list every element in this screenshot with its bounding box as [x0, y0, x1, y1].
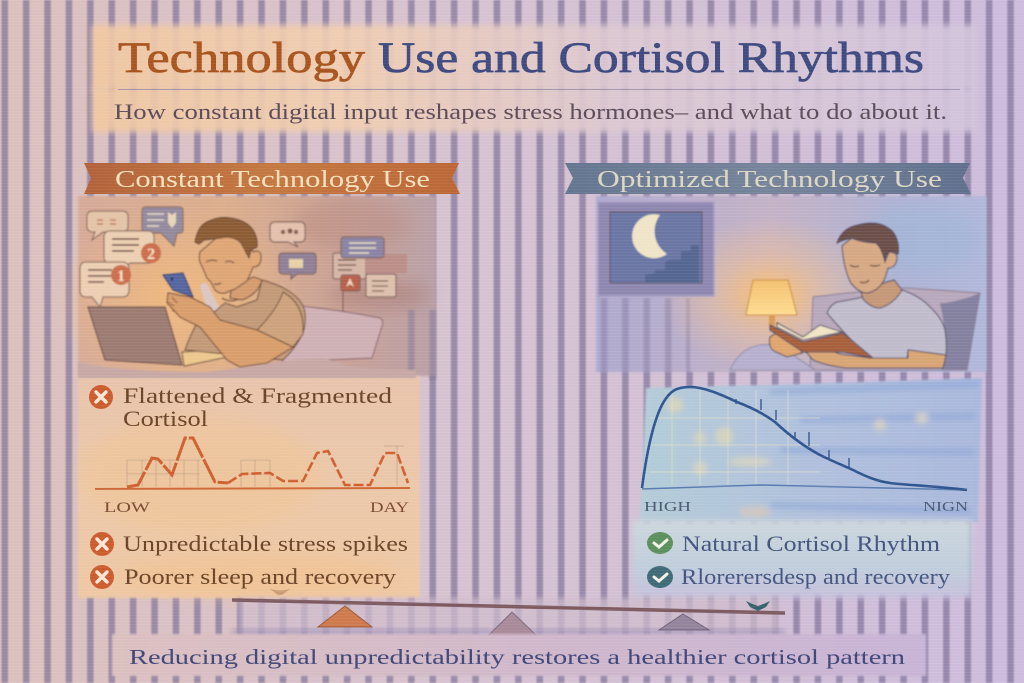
- icon: down chevron: [746, 601, 770, 611]
- title: Technology: [118, 35, 366, 82]
- panel: optimized technology use: [596, 196, 986, 598]
- seesaw balance: [232, 589, 785, 638]
- bed and pillow: [200, 283, 383, 362]
- laptop: [88, 307, 227, 366]
- bullet: natural cortisol rhythm: Natural Cortisol Rhythm: [682, 531, 940, 556]
- header panel: [92, 25, 976, 132]
- subtitle: How constant digital input reshapes stress hormones– and what to do about it.: [114, 99, 947, 124]
- neck: [858, 280, 902, 308]
- hair: [195, 218, 257, 258]
- bullet: flattened and fragmented cortisol: [89, 383, 392, 431]
- line chart: natural cortisol rhythm: [642, 387, 968, 515]
- bullet: poorer sleep and recovery: Poorer sleep and recovery: [124, 564, 396, 589]
- axis labels: LOW: [104, 500, 151, 516]
- line chart: fragmented cortisol: DAY: [370, 500, 409, 516]
- icon: chat bubbles left: 2: [147, 246, 155, 263]
- icon: night window with moon: [598, 202, 714, 296]
- bed and headboard: [730, 288, 980, 370]
- conclusion band: Reducing digital unpredictability restores a healthier cortisol pattern: [129, 645, 905, 669]
- phone: [163, 273, 193, 297]
- axis labels: HIGH: [644, 500, 691, 515]
- lower text panel background: [632, 520, 972, 598]
- bullet: better sleep and recovery: Rlorerersdesp and recovery: [681, 564, 950, 589]
- lamp: [746, 280, 797, 327]
- illustration: person reading by lamp: [730, 223, 980, 370]
- lower text panel background: [78, 376, 420, 598]
- icon: cross: [89, 385, 113, 409]
- icon: cross: [90, 565, 114, 589]
- shirt: [185, 280, 305, 360]
- person: [163, 218, 305, 367]
- shirt: [827, 290, 946, 360]
- banner: constant technology use: [84, 163, 460, 194]
- banner: constant technology use: Constant Technology Use: [115, 167, 430, 193]
- face: [199, 234, 261, 293]
- line chart: fragmented cortisol: [95, 438, 410, 516]
- person: [770, 223, 946, 368]
- bullet: flattened and fragmented cortisol: Flattened & Fragmented: [123, 383, 392, 408]
- chart background: [640, 378, 982, 522]
- arm and hands: [802, 344, 946, 368]
- icon: chat bubbles right: [270, 222, 407, 297]
- bullet: flattened and fragmented cortisol: Cortisol: [123, 406, 208, 431]
- warm glow: [50, 205, 300, 395]
- blanket: [78, 358, 416, 378]
- icon: check: [647, 532, 673, 554]
- illustration: person in bed with phone and laptop: [78, 218, 416, 378]
- face: [842, 238, 897, 293]
- panel: constant technology use: [50, 196, 438, 598]
- book: [770, 325, 873, 358]
- conclusion band: [112, 634, 926, 676]
- banner: optimized technology use: Optimized Technology Use: [597, 167, 942, 193]
- icon: check: [647, 566, 673, 588]
- lamp glow: [660, 217, 880, 373]
- neck: [230, 277, 262, 300]
- icon: chat bubbles left: 1: [117, 268, 125, 285]
- banner: optimized technology use: [565, 163, 971, 194]
- arm and hands: [167, 293, 293, 367]
- line chart: natural cortisol rhythm: NIGN: [923, 500, 968, 515]
- illustration background: [78, 196, 436, 376]
- header panel: Use and Cortisol Rhythms: [378, 35, 924, 82]
- hair: [837, 223, 898, 262]
- icon: chat bubbles left: [80, 207, 183, 307]
- icon: cross: [90, 532, 114, 556]
- bullet: unpredictable stress spikes: Unpredictable stress spikes: [123, 531, 408, 556]
